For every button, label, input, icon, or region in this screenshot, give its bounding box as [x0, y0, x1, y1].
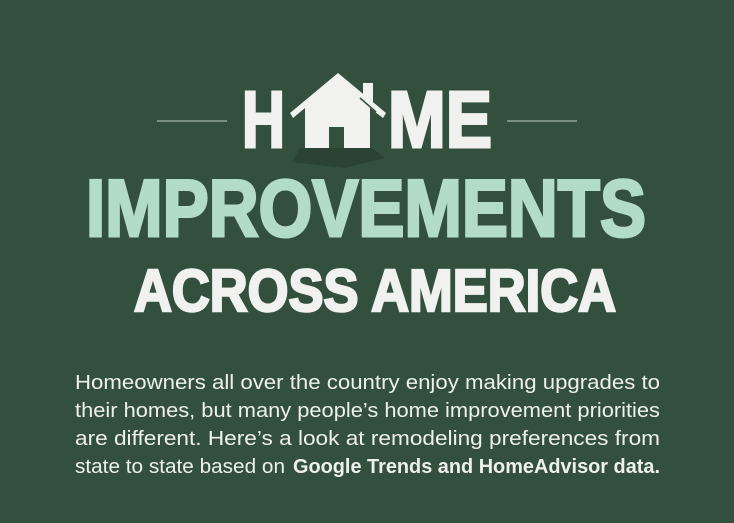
intro paragraph: their homes, but many people’s home improvement priorities — [75, 400, 660, 422]
intro paragraph: are different. Here’s a look at remodeling preferences from — [75, 428, 660, 450]
intro paragraph: Google Trends and HomeAdvisor data. — [293, 456, 660, 478]
intro paragraph — [75, 372, 660, 478]
title line 1: HOME with house icon — [157, 73, 577, 168]
title line 1: HOME with house icon: ME — [388, 75, 492, 164]
icon: house — [290, 73, 386, 168]
title line 2: IMPROVEMENTS: IMPROVEMENTS — [86, 164, 646, 254]
title line 1: HOME with house icon: H — [242, 75, 285, 164]
intro paragraph: state to state based on — [75, 456, 285, 478]
intro paragraph: Homeowners all over the country enjoy making upgrades to — [75, 372, 660, 394]
title line 3: ACROSS AMERICA: ACROSS AMERICA — [134, 258, 616, 324]
